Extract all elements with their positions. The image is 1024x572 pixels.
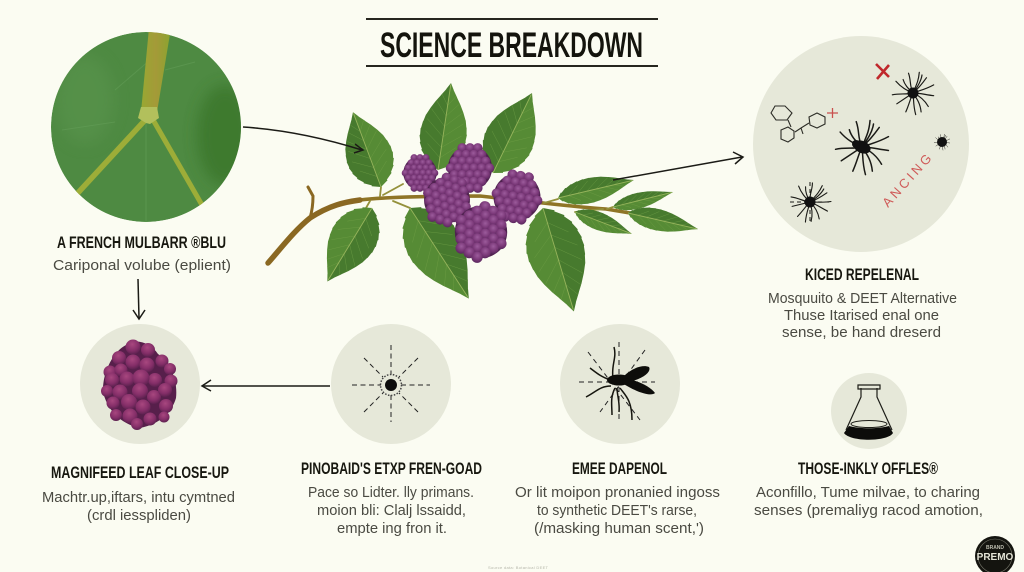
heading: EMEE DAPENOL [572,459,667,478]
diagram circle [753,36,969,252]
molecule structure [771,106,825,142]
photo circle: leaf veins [51,28,253,225]
flask icon [844,385,893,440]
panel: magnified berries [42,324,235,524]
heading: PINOBAID'S ETXP FREN-GOAD [301,459,482,478]
body text: sense, be hand dreserd [782,325,941,341]
panel: DEET mimic [515,324,720,537]
berry clusters [402,143,547,272]
icon circle [331,324,451,444]
radial dashed star icon [352,345,430,422]
body text [42,490,235,524]
leaves [307,80,701,320]
body text: Mosquuito & DEET Alternative [768,291,957,307]
arrow: down to berry [133,279,145,319]
red cross [876,64,889,79]
heading: MAGNIFEED LEAF CLOSE-UP [51,463,229,482]
mosquito silhouette small [934,134,950,150]
body text: Aconfillo, Tume milvae, to charing [756,485,980,501]
body text: to synthetic DEET's rarse, [537,503,697,519]
badge: brand seal: PREMO [977,552,1014,563]
panel: leaf close-up [51,28,253,274]
body text: Pace so Lidter. lly primans. [308,485,474,501]
berry cluster icon [101,340,178,430]
heading: A FRENCH MULBARR ®BLU [57,233,226,252]
icon circle [560,324,680,444]
body text: Thuse Itarised enal one [784,308,939,324]
badge: brand seal: BRAND [986,545,1004,551]
body text: Machtr.up,iftars, intu cymtned [42,490,235,506]
mosquito silhouette centre [836,121,888,175]
body text [768,291,957,341]
heading: THOSE-INKLY OFFLES® [798,459,938,478]
arrow: leaf close-up to branch leaf [243,127,363,153]
badge: brand seal [975,536,1015,572]
branch [268,184,630,263]
arrow: star icon to berry icon [202,380,330,391]
arrow: branch to repellent diagram [613,152,743,180]
panel: repellent diagram [753,36,969,341]
body text: (/masking human scent,') [534,521,704,537]
red plus [827,108,838,118]
body text [754,485,983,519]
central illustration: callicarpa branch [268,80,701,320]
panel: sensory effects [754,373,983,519]
body text [515,485,720,537]
body text: Or lit moipon pronanied ingoss [515,485,720,501]
body text: empte ing fron it. [337,521,447,537]
rotated red label: ANCING [879,151,934,210]
panel: scent disruption [301,324,482,537]
icon circle [80,324,200,444]
icon circle [831,373,907,449]
body text: senses (premaliyg racod amotion, [754,503,983,519]
caption: Cariponal volube (eplient) [53,258,231,274]
footer note: Source data: Botanical DEET [488,565,549,570]
mosquito silhouette lower left [785,177,835,228]
mosquito silhouette top right [892,72,934,115]
body text [308,485,474,537]
title: SCIENCE BREAKDOWN [380,26,643,65]
body text: moion bli: Clalj lssaidd, [317,503,466,519]
heading: KICED REPELENAL [805,265,919,284]
mosquito icon [579,342,655,420]
body text: (crdl iesspliden) [87,508,191,524]
